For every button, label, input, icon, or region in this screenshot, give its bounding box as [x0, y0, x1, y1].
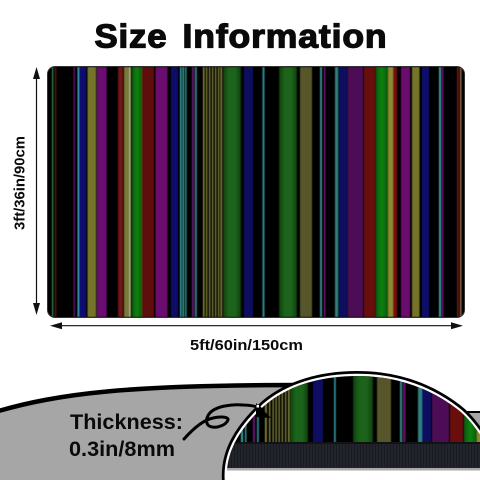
arrow: width dimension [50, 322, 463, 329]
panel: thickness backdrop [0, 385, 480, 480]
arrow: thickness pointer [184, 403, 271, 439]
thickness label: 0.3in/8mm [69, 437, 175, 461]
thickness label: Thickness: [70, 410, 183, 434]
mat edge band [220, 442, 480, 468]
arrow: height dimension [33, 67, 40, 315]
title: Size [94, 18, 168, 54]
height label: 3ft/36in/90cm [12, 136, 28, 230]
width label: 5ft/60in/150cm [190, 338, 303, 354]
panel: striped mat [48, 66, 464, 318]
title: Information [182, 18, 388, 54]
thickness label [69, 410, 183, 461]
title [94, 18, 388, 54]
panel: zoomed edge lens [220, 370, 480, 480]
